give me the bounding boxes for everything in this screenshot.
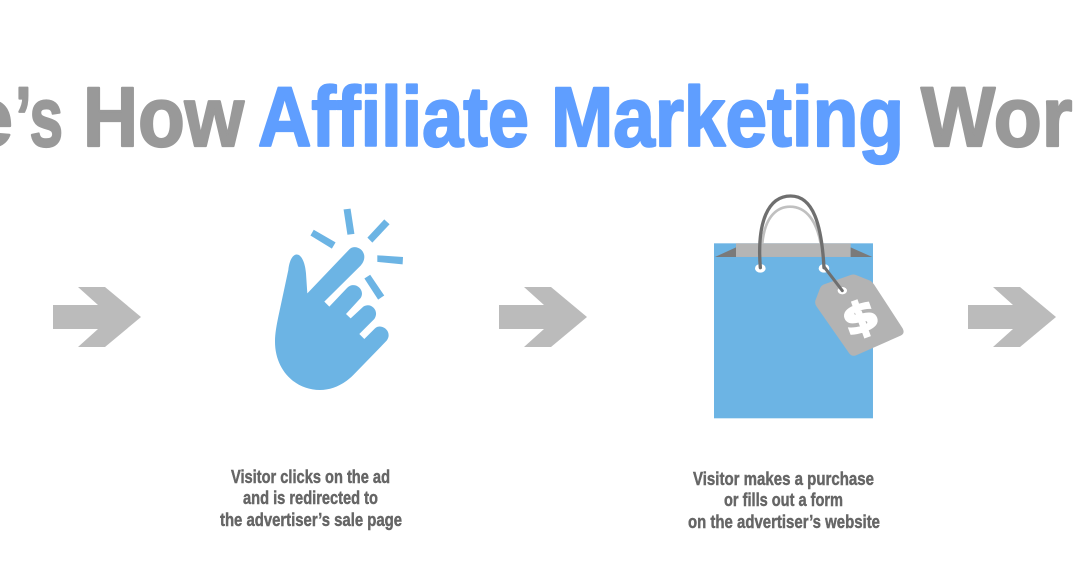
price tag: [815, 274, 904, 356]
bag body: [714, 243, 873, 418]
title: Affiliate: [258, 70, 529, 164]
arrow 1: [53, 287, 141, 347]
icon: shopping bag with price tag: [714, 196, 904, 418]
caption: visitor purchases: on the advertiser’s website: [688, 512, 880, 532]
hand: [275, 247, 389, 390]
tag eyelet: [838, 287, 847, 294]
caption: visitor clicks: and is redirected to: [243, 488, 378, 508]
caption: visitor purchases: or fills out a form: [724, 490, 843, 510]
arrow 2: [499, 287, 587, 347]
bag folds: [715, 247, 872, 257]
caption: visitor purchases: Visitor makes a purchase: [693, 469, 874, 489]
caption: visitor clicks: [220, 467, 402, 530]
back handle: [762, 207, 821, 243]
click sparks: [311, 209, 402, 299]
caption: visitor purchases: [688, 469, 880, 532]
bag opening: [736, 243, 851, 257]
tag string: [824, 267, 842, 291]
title: How: [83, 70, 245, 164]
title: ’s: [15, 70, 63, 164]
caption: visitor clicks: Visitor clicks on the ad: [231, 467, 390, 487]
icon: clicking hand: [275, 209, 402, 390]
dollar sign: $: [836, 289, 885, 346]
title: Marketing: [551, 70, 904, 164]
caption: visitor clicks: the advertiser’s sale page: [220, 510, 402, 530]
arrow 3: [968, 287, 1056, 347]
front handle: [760, 196, 824, 268]
title: [0, 70, 1074, 164]
eyelets: [755, 264, 766, 273]
